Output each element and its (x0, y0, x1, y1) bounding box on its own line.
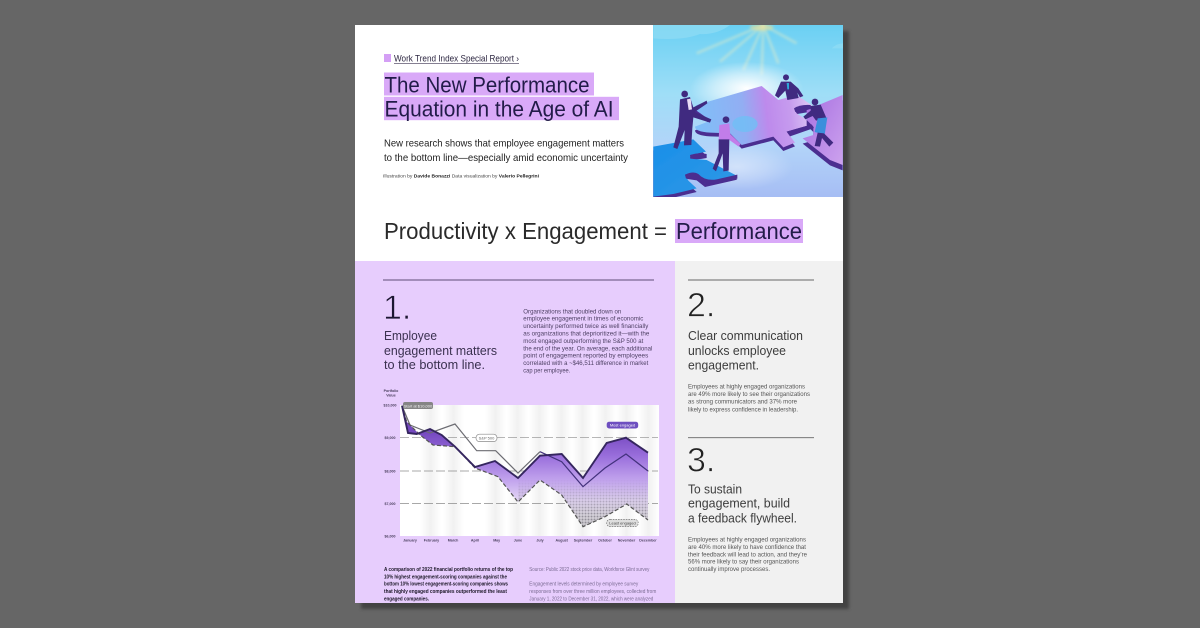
chart: portfolio value by month (384, 389, 659, 542)
section 3 body: continually improve processes. (688, 567, 770, 573)
y axis labels: $10,000 (384, 403, 396, 407)
x axis labels: June (514, 538, 522, 542)
chart source notes: Source: Public 2022 stock price data, Workforce Glint survey (529, 567, 649, 573)
chart source notes (529, 567, 657, 602)
y axis labels: Value (386, 394, 396, 398)
section 1 body: correlated with a ~$46,511 difference in market (523, 360, 649, 367)
section 2 heading: Clear communication (688, 328, 803, 343)
line: least engaged (402, 406, 648, 527)
section 2 number: 2. (687, 287, 715, 325)
x axis labels: October (598, 538, 612, 542)
panel: section 1 (355, 261, 675, 603)
x axis labels: February (424, 538, 439, 542)
section 1 body: cap per employee. (523, 368, 571, 374)
title (384, 72, 619, 122)
section 3 body: Employees at highly engaged organizations (688, 538, 806, 544)
lower-left slots (685, 153, 737, 184)
pill: start value: Start at $10,000 (404, 403, 433, 408)
section 1 number: 1. (383, 289, 411, 327)
clouds (653, 25, 843, 48)
pill: start value (403, 402, 433, 409)
section 1 body (523, 308, 652, 374)
section 1 body: as organizations that deprioritized it—with the (523, 330, 650, 338)
sun rays (697, 25, 797, 75)
x axis labels (403, 538, 657, 542)
x axis labels: January (403, 538, 417, 542)
y axis labels: $9,000 (384, 436, 396, 440)
section 2 heading: engagement. (688, 357, 759, 372)
x axis labels: September (574, 538, 593, 542)
section 3 body: their feedback will lead to action, and they’re (688, 552, 808, 558)
pill: S&P 500 (476, 434, 497, 442)
section 3 heading: To sustain (688, 481, 742, 496)
section 3 body: 56% more likely to say their organizations (688, 560, 799, 566)
central piece blue highlight (732, 116, 758, 132)
section 1 heading (384, 328, 497, 372)
section 3 heading (688, 481, 797, 525)
line: S&P 500 right part (540, 452, 648, 487)
x axis labels: March (448, 538, 458, 542)
puzzle piece: central (693, 86, 815, 147)
chart source notes: January 1, 2022 to December 31, 2022, which were analyzed (529, 596, 653, 602)
x axis labels: May (493, 538, 500, 542)
section 2 body: Employees at highly engaged organizations (688, 385, 805, 391)
section 3 heading: engagement, build (688, 496, 790, 511)
shaded area between top and bottom engagement (402, 406, 648, 527)
puzzle tabs (787, 105, 814, 136)
person: back man (775, 74, 803, 100)
x axis labels: April (471, 538, 479, 542)
panel: sections 2 and 3 (675, 261, 843, 603)
y axis labels: $6,000 (384, 534, 396, 538)
section 2 heading: unlocks employee (688, 343, 786, 358)
chart plot background (400, 405, 659, 536)
white header panel (355, 25, 843, 261)
pill: least engaged (607, 519, 638, 527)
puzzle piece: lower-left (653, 139, 737, 197)
report link: Work Trend Index Special Report › (394, 54, 519, 64)
y axis labels: $7,000 (384, 502, 396, 506)
glow (694, 64, 799, 102)
sun (750, 24, 774, 31)
chart caption (384, 567, 513, 602)
subtitle: to the bottom line—especially amid economic uncertainty (384, 153, 629, 164)
x axis labels: November (618, 538, 636, 542)
puzzle piece: right (803, 95, 843, 165)
section 2 heading (688, 328, 803, 372)
section 2 body: likely to express confidence in leadership. (688, 407, 798, 413)
x axis labels: August (556, 538, 569, 542)
title: The New Performance (384, 73, 590, 98)
section 1 heading: to the bottom line. (384, 357, 485, 372)
x axis labels: July (536, 538, 544, 542)
credits: Illustration by Davide Bonazzi Data visualization by Valerio Pellegrini (383, 174, 539, 179)
y axis labels: $8,000 (384, 469, 396, 473)
x axis labels: December (639, 538, 657, 542)
section 1 body: uncertainty performed twice as well financially (523, 323, 649, 330)
section 3 body (688, 538, 808, 573)
chart caption: bottom 10% lowest engagement-scoring companies shows (384, 582, 508, 588)
equation headline: Performance (676, 218, 802, 244)
puzzle piece: right edge (803, 100, 843, 170)
gridlines (400, 438, 658, 504)
section 1 body: point of engagement reported by employees (523, 353, 648, 360)
section 2 body: are 49% more likely to see their organizations (688, 392, 810, 398)
illustration: people assembling puzzle pieces (653, 24, 843, 200)
page drop shadow (361, 31, 849, 609)
pill: least engaged: Least engaged (609, 521, 636, 526)
chart caption: engaged companies. (384, 596, 429, 602)
equation headline: Productivity x Engagement = (384, 218, 667, 244)
section 1 body: the end of the year. On average, each additional (523, 345, 652, 352)
subtitle: New research shows that employee engagement matters (384, 139, 624, 150)
subtitle (384, 139, 629, 164)
y axis labels (384, 389, 399, 538)
section 2 body: as strong communicators and 37% more (688, 400, 798, 406)
pill: highly engaged: Most engaged (610, 423, 635, 428)
puzzle piece: lower-left edge (653, 150, 738, 197)
person: right woman (803, 99, 833, 147)
chart caption: A comparison of 2022 financial portfolio returns of the top (384, 567, 513, 573)
section 1 heading: engagement matters (384, 343, 497, 358)
section 1 heading: Employee (384, 328, 437, 343)
chart caption: 10% highest engagement-scoring companies against the (384, 574, 507, 580)
section 3 heading: a feedback flywheel. (688, 510, 797, 525)
section 1 body: Organizations that doubled down on (523, 308, 622, 315)
title: Equation in the Age of AI (384, 97, 614, 122)
line: highly engaged (402, 406, 648, 478)
section 2 body (688, 385, 810, 413)
puzzle piece: central edge (694, 109, 809, 151)
document page (355, 24, 843, 603)
section 1 body: most engaged outperforming the S&P 500 at (523, 338, 644, 345)
pill: S&P 500: S&P 500 (479, 436, 495, 440)
chart source notes: Engagement levels determined by employee survey (529, 582, 638, 588)
section 1 body: employee engagement in times of economic (523, 316, 643, 323)
person: centre woman (713, 116, 741, 171)
section 3 number: 3. (687, 442, 715, 480)
chart caption: that highly engaged companies outperformed the least (384, 589, 507, 595)
pill: highly engaged (607, 422, 638, 428)
stipple texture (518, 482, 648, 526)
chart source notes: responses from over three million employees, collected from (529, 589, 657, 595)
person: left man (673, 91, 711, 149)
section 3 body: are 40% more likely to have confidence that (688, 545, 806, 551)
y axis labels: Portfolio (384, 389, 399, 393)
line: S&P 500 left part (402, 406, 540, 473)
